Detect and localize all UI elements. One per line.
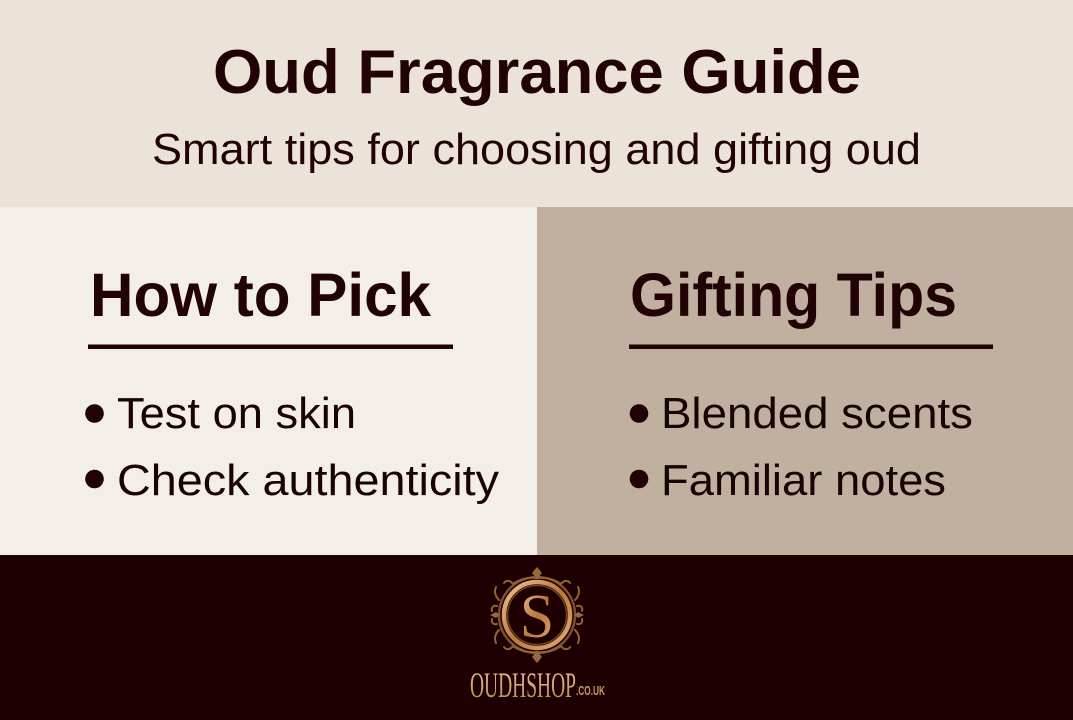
panel: gifting tips	[537, 207, 1073, 555]
heading: how to pick: How to Pick	[90, 261, 431, 329]
heading: gifting tips: Gifting Tips	[630, 261, 957, 329]
footer band	[0, 555, 1073, 720]
list item: test on skin: Test on skin	[117, 389, 356, 438]
subtitle: Smart tips for choosing and gifting oud	[152, 125, 921, 174]
header band	[0, 0, 1073, 207]
list item: familiar notes: Familiar notes	[661, 456, 946, 505]
list item: check authenticity: Check authenticity	[117, 456, 499, 505]
logo wordmark	[470, 665, 605, 705]
logo monogram: S	[520, 583, 554, 651]
logo emblem	[490, 567, 584, 663]
title: Oud Fragrance Guide	[213, 38, 861, 107]
list item: blended scents: Blended scents	[661, 389, 973, 438]
logo wordmark: .CO.UK	[576, 683, 605, 698]
logo wordmark: OUDHSHOP	[470, 665, 576, 705]
panel: how to pick	[0, 207, 537, 555]
